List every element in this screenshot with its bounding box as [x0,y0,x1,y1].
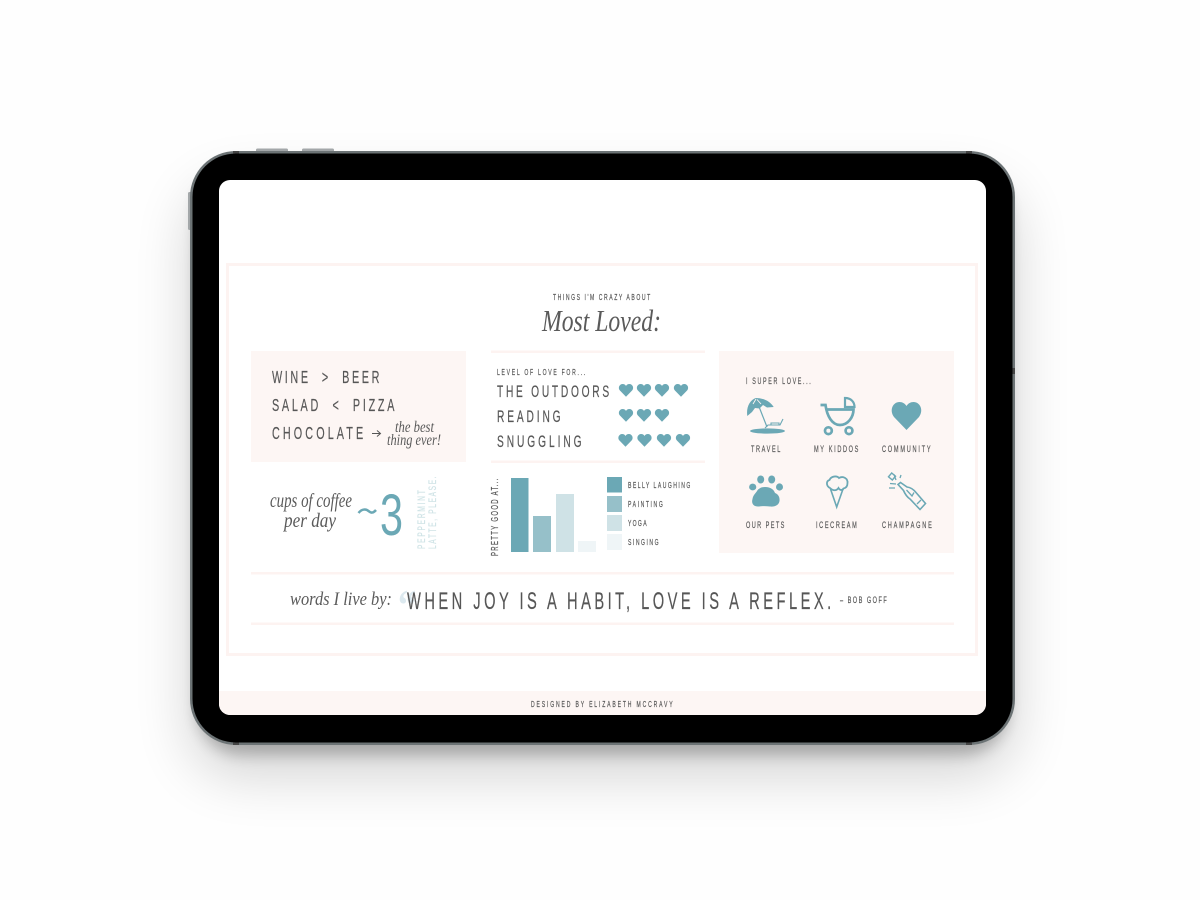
panel: comparisons: SALAD < PIZZA [272,396,394,416]
quote band: – BOB GOFF [840,595,887,605]
panel: super love: ICECREAM [816,520,857,530]
quote band: WHEN JOY IS A HABIT, LOVE IS A REFLEX. [407,588,831,615]
hearts: the outdoors [619,384,688,397]
device shadow [190,165,1015,775]
panel: super love [719,351,954,553]
coffee stat: PEPPERMINT [415,490,427,549]
icon: champagne [888,473,926,510]
quote band: words I live by: [290,589,392,610]
icon: heart [892,402,921,430]
panel: comparisons: the best [395,419,434,436]
page frame [228,264,976,654]
panel: super love: I SUPER LOVE... [746,376,811,386]
coffee stat: 3 [380,483,403,548]
coffee stat [270,476,438,549]
heading [541,294,661,338]
tablet screen [219,180,986,715]
bar chart: pretty good at: BELLY LAUGHING [628,482,690,490]
tablet device [188,148,1015,745]
coffee stat: cups of coffee [270,490,352,512]
icon: stroller [820,398,854,434]
panel: comparisons: WINE > BEER [272,368,380,388]
icon: paw [749,476,783,507]
quote band [251,572,954,629]
panel: level of love [491,350,705,463]
panel: super love: COMMUNITY [882,444,931,454]
panel: comparisons [251,351,466,462]
bar chart: pretty good at: PRETTY GOOD AT... [490,479,500,556]
footer credit: DESIGNED BY ELIZABETH MCCRAVY [531,701,673,709]
panel: level of love: READING [497,406,561,426]
heading: Most Loved: [541,303,661,338]
bar chart: pretty good at: SINGING [628,539,659,547]
hearts: snuggling [618,434,690,447]
panel: super love: OUR PETS [746,520,784,530]
bar chart: pretty good at: YOGA [628,520,647,528]
hearts: reading [619,409,669,422]
panel: level of love: THE OUTDOORS [497,381,609,401]
panel: level of love: SNUGGLING [497,431,582,451]
arrow [372,430,380,436]
icon: travel [747,398,785,434]
panel: comparisons: thing ever! [387,432,441,449]
panel: comparisons: CHOCOLATE [272,424,363,444]
panel: super love: MY KIDDOS [814,444,858,454]
coffee stat: LATTE, PLEASE. [426,476,438,549]
panel: level of love: LEVEL OF LOVE FOR... [497,369,585,377]
bar chart: pretty good at [490,477,690,556]
bar chart: pretty good at: PAINTING [628,501,663,509]
quote mark: “ [398,583,416,629]
panel: super love: CHAMPAGNE [882,520,932,530]
coffee stat: per day [282,510,336,532]
icon: icecream [827,476,848,507]
heading: THINGS I'M CRAZY ABOUT [553,294,651,302]
panel: super love: TRAVEL [751,444,780,454]
